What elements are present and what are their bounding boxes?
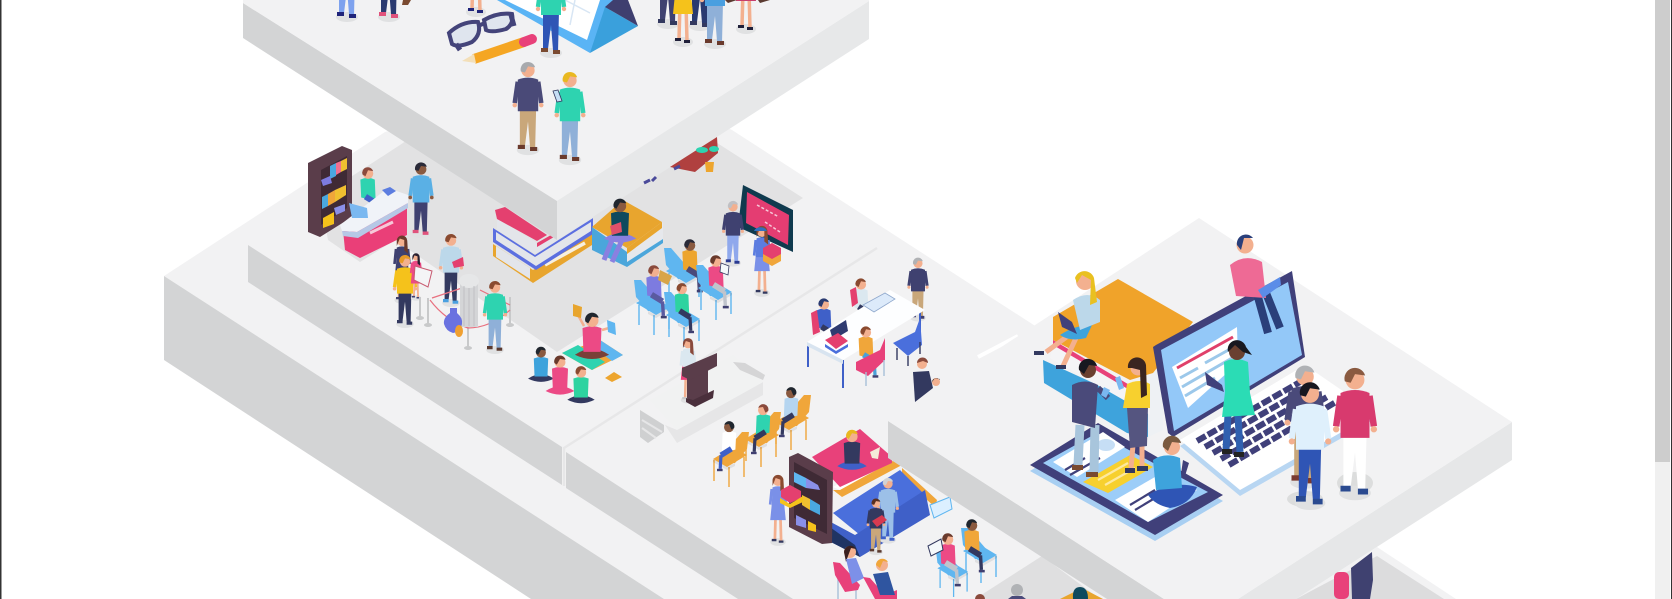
orange chairs with audience	[713, 387, 811, 487]
middle platform: upper step right wall	[566, 452, 793, 599]
storyteller	[573, 304, 616, 359]
pencil on top platform	[462, 39, 532, 63]
white floor marking	[978, 336, 1018, 357]
mother and child	[913, 358, 940, 402]
podium	[682, 353, 717, 407]
man in red shirt	[1333, 368, 1377, 500]
laptop platform: walls	[888, 421, 1512, 599]
big orange book	[1043, 279, 1193, 437]
table meeting: table	[807, 290, 925, 388]
museum: man in teal with phone	[483, 281, 507, 354]
museum: stanchions and ropes	[416, 288, 514, 350]
middle platform: outer wall	[164, 276, 664, 599]
laptop screen	[1153, 271, 1305, 437]
floor seam	[564, 248, 877, 486]
crowd legs top right	[653, 0, 770, 49]
blackboard	[738, 185, 793, 252]
top platform: floor and walls	[243, 0, 869, 240]
museum: column	[459, 274, 479, 327]
scrollbar thumb	[1655, 0, 1670, 462]
reception: receptionist	[360, 167, 381, 220]
stacked books left	[493, 207, 593, 283]
plant and couch behind top platform	[644, 137, 719, 183]
man in white shirt	[1287, 382, 1331, 510]
woman in teal on keyboard	[1205, 340, 1255, 457]
kids mat	[562, 340, 623, 370]
museum queue: man in yellow	[393, 255, 417, 328]
museum: vases	[444, 308, 463, 337]
sofa	[827, 468, 952, 557]
reception: bookshelf	[308, 146, 352, 237]
old man talking	[512, 62, 544, 155]
woman in yellow with phone	[1115, 357, 1150, 473]
old woman and reading man on sofa	[867, 478, 899, 555]
laptop keyboard	[1197, 382, 1336, 465]
table meeting: chairs and back people	[811, 278, 873, 350]
middle platform: floor	[164, 70, 1107, 599]
glasses on top platform	[449, 14, 514, 50]
old man on keyboard	[1284, 366, 1326, 489]
blonde woman with laptop on books	[1034, 271, 1100, 369]
speaker	[681, 338, 695, 404]
man in navy with phone	[1072, 359, 1110, 477]
teacher	[722, 201, 744, 267]
woman with backpack below platform	[1334, 552, 1373, 599]
partly visible figures at the bottom	[975, 584, 1103, 599]
shadow on the middle floor	[320, 100, 803, 352]
blond man with phone	[553, 72, 586, 165]
table meeting: man in orange with chair	[856, 326, 885, 386]
museum queue: girl with paper	[411, 253, 432, 301]
blue chairs lower right	[928, 519, 997, 597]
bookshelf with books	[789, 453, 833, 544]
crowd legs top left	[332, 0, 486, 22]
pink chairs with audience	[833, 546, 897, 599]
table meeting: old man standing	[907, 258, 929, 322]
girl with stack of books	[770, 475, 803, 546]
reception: desk	[340, 187, 408, 258]
girl carrying books	[754, 226, 781, 297]
lower right floor	[1296, 547, 1456, 599]
stage	[640, 355, 765, 443]
man sitting on phone	[1148, 436, 1197, 508]
man at calendar	[536, 0, 566, 58]
stacked books with reader	[592, 199, 663, 267]
museum queue: man with book	[439, 234, 464, 307]
middle platform: upper step left wall	[248, 245, 562, 485]
laptop platform: floor	[888, 218, 1512, 599]
phone body	[1030, 423, 1223, 541]
man sitting on laptop	[1230, 234, 1281, 333]
reception: customer	[408, 162, 434, 238]
calendar tent	[497, 0, 638, 53]
scrollbar track	[1655, 0, 1670, 599]
museum queue: woman in navy	[394, 236, 410, 304]
lower floor shadow below the laptop platform	[975, 556, 1100, 599]
seated children	[528, 347, 622, 403]
big pink book with reader	[812, 429, 902, 497]
table meeting: blue chair	[893, 318, 922, 366]
laptop base	[1180, 365, 1375, 496]
blue chairs with audience	[634, 239, 732, 347]
